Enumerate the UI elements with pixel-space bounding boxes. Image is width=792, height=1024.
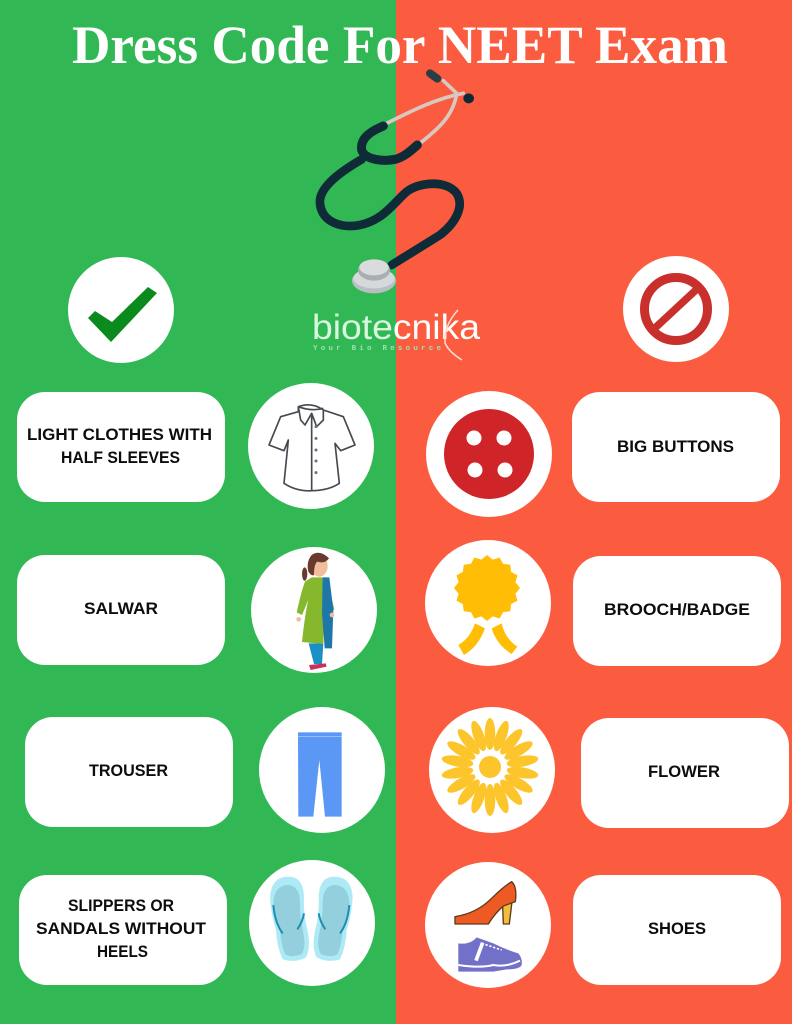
card: light clothes: HALF SLEEVES xyxy=(61,449,180,467)
card: shoes xyxy=(573,875,781,985)
icon: shirt xyxy=(248,383,374,509)
card: shoes: SHOES xyxy=(648,920,706,938)
card: flower: FLOWER xyxy=(648,763,720,781)
title: Dress Code For NEET Exam xyxy=(72,15,728,75)
icon: big button xyxy=(426,391,552,517)
card: trouser: TROUSER xyxy=(89,762,168,780)
icon: slippers xyxy=(249,860,375,986)
panel: not allowed background xyxy=(396,0,792,1024)
card: slippers: SLIPPERS OR xyxy=(68,897,174,915)
icon: shoes xyxy=(425,862,551,988)
card: flower xyxy=(581,718,789,828)
icon: trouser xyxy=(259,707,385,833)
card: brooch or badge: BROOCH/BADGE xyxy=(604,601,750,619)
card: light clothes xyxy=(17,392,225,502)
icon: woman in salwar xyxy=(251,547,377,673)
icon: flower xyxy=(429,707,555,833)
card: light clothes: LIGHT CLOTHES WITH xyxy=(27,426,212,444)
card: trouser xyxy=(25,717,233,827)
icon: badge xyxy=(425,540,551,666)
card: slippers: SANDALS WITHOUT xyxy=(36,920,206,938)
logo: biotecnika: biotecnika xyxy=(312,308,481,347)
icon: prohibited sign xyxy=(623,256,729,362)
panel: allowed background xyxy=(0,0,396,1024)
card: big buttons xyxy=(572,392,780,502)
icon: check mark xyxy=(68,257,174,363)
card: slippers: HEELS xyxy=(97,943,148,961)
card: big buttons: BIG BUTTONS xyxy=(617,438,734,456)
card: salwar xyxy=(17,555,225,665)
card: salwar: SALWAR xyxy=(84,600,158,618)
logo: biotecnika: Your Bio Resource xyxy=(313,345,441,353)
card: slippers xyxy=(19,875,227,985)
card: brooch or badge xyxy=(573,556,781,666)
icon: stethoscope xyxy=(320,73,474,293)
